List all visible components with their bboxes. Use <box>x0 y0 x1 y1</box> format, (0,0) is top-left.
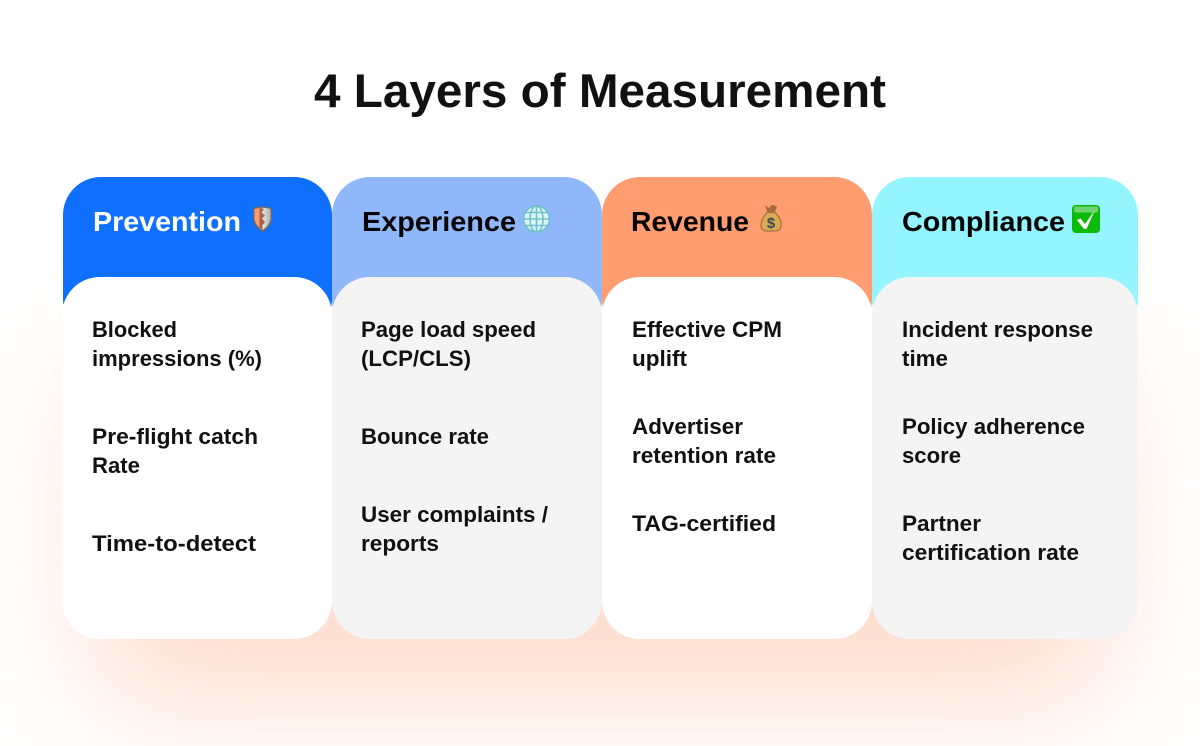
panel: experience metrics <box>332 277 602 639</box>
panel: experience header <box>332 177 602 337</box>
icon: money bag: $ <box>767 215 776 232</box>
metric: user complaints: reports <box>361 531 439 556</box>
metric: blocked impressions: impressions (%) <box>92 346 262 371</box>
title: 4 Layers of Measurement <box>314 64 886 117</box>
panel: compliance metrics <box>872 277 1138 639</box>
panel: revenue metrics <box>602 277 872 639</box>
metric: policy adherence score: Policy adherence <box>902 414 1085 439</box>
panel: revenue header <box>602 177 872 337</box>
panel: prevention header: Prevention <box>93 206 241 237</box>
metric: advertiser retention rate: retention rate <box>632 443 776 468</box>
metric: user complaints: User complaints / <box>361 502 548 527</box>
icon: check mark <box>1072 205 1100 233</box>
icon: money bag <box>761 205 781 232</box>
panel: experience header: Experience <box>362 206 516 237</box>
metric: page load speed: (LCP/CLS) <box>361 346 471 371</box>
metric: pre-flight catch rate: Rate <box>92 453 140 478</box>
metric: bounce rate: Bounce rate <box>361 424 489 449</box>
metric: advertiser retention rate: Advertiser <box>632 414 743 439</box>
panel: prevention header <box>63 177 332 337</box>
icon: globe <box>524 206 550 232</box>
metric: partner certification rate <box>902 511 1079 565</box>
metric: incident response time: Incident response <box>902 317 1093 342</box>
metric: pre-flight catch rate <box>92 424 258 478</box>
background glow <box>90 360 1110 700</box>
metric: advertiser retention rate <box>632 414 776 468</box>
panel: compliance header: Compliance <box>902 206 1065 237</box>
metric: user complaints <box>361 502 548 556</box>
metric: blocked impressions <box>92 317 262 371</box>
metric: time-to-detect: Time-to-detect <box>92 531 257 556</box>
metric: policy adherence score <box>902 414 1085 468</box>
metric: policy adherence score: score <box>902 443 961 468</box>
metric: partner certification rate: certification rate <box>902 540 1079 565</box>
metric: page load speed <box>361 317 536 371</box>
metric: effective cpm uplift: Effective CPM <box>632 317 782 342</box>
panel: prevention metrics <box>62 277 332 639</box>
metric: page load speed: Page load speed <box>361 317 536 342</box>
metric: incident response time <box>902 317 1093 371</box>
metric: tag-certified: TAG-certified <box>632 511 776 536</box>
metric: effective cpm uplift: uplift <box>632 346 688 371</box>
metric: incident response time: time <box>902 346 948 371</box>
metric: pre-flight catch rate: Pre-flight catch <box>92 424 258 449</box>
icon: shield <box>253 206 272 232</box>
panel: revenue header: Revenue <box>631 206 749 237</box>
panel: compliance header <box>872 177 1138 337</box>
metric: effective cpm uplift <box>632 317 782 371</box>
metric: partner certification rate: Partner <box>902 511 981 536</box>
metric: blocked impressions: Blocked <box>92 317 177 342</box>
